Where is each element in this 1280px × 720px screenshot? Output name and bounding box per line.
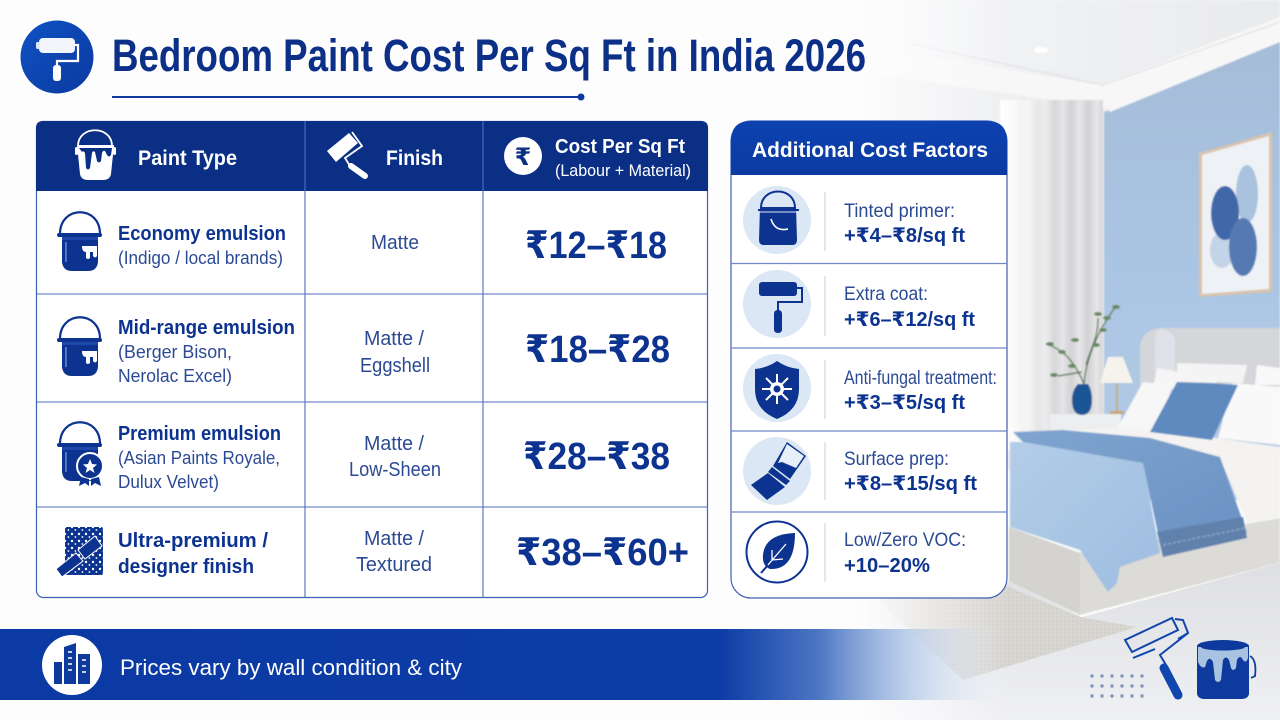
row: ultra-premium / designer finish: designer finish (118, 556, 254, 578)
crown molding (873, 17, 1280, 112)
rug (877, 587, 1137, 680)
curtains (1000, 100, 1103, 450)
row: economy emulsion: ₹12–₹18 (525, 225, 667, 267)
bed sheet (1067, 427, 1280, 523)
row: premium emulsion: Dulux Velvet) (118, 472, 219, 492)
factor: anti-fungal treatment: +₹3–₹5/sq ft (844, 392, 965, 414)
icon: decorative paint can (1197, 640, 1255, 699)
row: economy emulsion: Economy emulsion (118, 223, 286, 245)
throw blanket (1013, 430, 1247, 557)
blue vase (1072, 384, 1092, 415)
factor: surface prep: +₹8–₹15/sq ft (844, 473, 977, 495)
nightstand (1050, 414, 1121, 436)
panel: additional cost factors (731, 121, 1007, 598)
blue wall (1104, 42, 1280, 500)
floor (780, 563, 1280, 720)
header: cost per sq ft (504, 136, 691, 180)
row: ultra-premium / designer finish (56, 527, 689, 578)
factor: anti-fungal treatment (743, 354, 997, 422)
ceiling light (1034, 47, 1048, 53)
factor: tinted primer (743, 186, 965, 254)
factor: extra coat: +₹6–₹12/sq ft (844, 309, 975, 331)
row: premium emulsion (57, 422, 670, 492)
icon: city buildings (42, 635, 102, 695)
quilt (1010, 442, 1160, 592)
header: cost per sq ft: (Labour + Material) (555, 162, 691, 180)
factor: surface prep: Surface prep: (844, 449, 949, 470)
back wall (860, 70, 1105, 470)
banner text: Prices vary by wall condition & city (120, 655, 463, 680)
column and row lines (36, 121, 708, 598)
row: mid-range emulsion: Eggshell (360, 355, 430, 377)
side panel heading: Additional Cost Factors (752, 138, 988, 162)
row: ultra-premium / designer finish: Ultra-premium / (118, 530, 268, 552)
row: premium emulsion: (Asian Paints Royale, (118, 448, 280, 468)
wall art (1199, 132, 1272, 297)
icon: decorative paint roller (1125, 618, 1188, 695)
row: ultra-premium / designer finish: Textured (356, 554, 432, 576)
title underline (112, 94, 584, 100)
row lines (731, 264, 1007, 512)
factor: anti-fungal treatment: Anti-fungal treatment: (844, 368, 997, 389)
row: economy emulsion: Matte (371, 232, 419, 254)
factor: tinted primer: +₹4–₹8/sq ft (844, 225, 965, 247)
header: paint type (75, 130, 237, 180)
lamp (1100, 357, 1133, 414)
factor: surface prep (743, 437, 977, 505)
throw fringe (1157, 517, 1247, 557)
row: mid-range emulsion: (Berger Bison, (118, 342, 232, 362)
row: mid-range emulsion: Nerolac Excel) (118, 366, 232, 386)
factor: low/zero voc: +10–20% (844, 555, 930, 577)
row: premium emulsion: Premium emulsion (118, 423, 281, 445)
headboard (1140, 328, 1280, 420)
factor: extra coat: Extra coat: (844, 284, 928, 305)
pillows (1177, 363, 1247, 383)
title: Bedroom Paint Cost Per Sq Ft in India 2026 (112, 30, 866, 81)
side panel header (731, 121, 1007, 175)
panel: paint cost table (36, 121, 708, 598)
ceiling (840, 0, 1280, 120)
header: finish: Finish (386, 147, 443, 170)
logo: paint roller in circle (20, 20, 94, 94)
row: premium emulsion: ₹28–₹38 (523, 436, 670, 478)
header: paint type: Paint Type (138, 147, 237, 170)
row: economy emulsion (57, 212, 667, 271)
plant (1046, 306, 1116, 384)
row: ultra-premium / designer finish: ₹38–₹60+ (516, 532, 689, 574)
row: premium emulsion: Matte / (364, 433, 424, 455)
row: premium emulsion: Low-Sheen (349, 459, 441, 481)
bed base (1009, 518, 1280, 615)
header: cost per sq ft: ₹ (515, 144, 531, 171)
factor: low/zero voc: Low/Zero VOC: (844, 530, 966, 551)
row: mid-range emulsion: Matte / (364, 328, 424, 350)
header: cost per sq ft: Cost Per Sq Ft (555, 136, 685, 158)
side panel body (731, 121, 1007, 598)
factor: extra coat (743, 270, 975, 338)
table header band (36, 121, 708, 191)
row: mid-range emulsion (57, 317, 670, 386)
decorative dots (1090, 674, 1144, 698)
table body (36, 122, 708, 598)
row: ultra-premium / designer finish: Matte / (364, 528, 424, 550)
row: mid-range emulsion: ₹18–₹28 (525, 329, 670, 371)
header: finish (327, 132, 443, 176)
row: economy emulsion: (Indigo / local brands) (118, 248, 283, 268)
bedroom photo (840, 0, 1280, 615)
photo fade to white (700, 0, 1010, 720)
vertical separators (824, 192, 826, 582)
factor: tinted primer: Tinted primer: (844, 201, 955, 222)
factor: low/zero voc (746, 522, 966, 582)
row: mid-range emulsion: Mid-range emulsion (118, 317, 295, 339)
bottom banner (0, 629, 1000, 700)
